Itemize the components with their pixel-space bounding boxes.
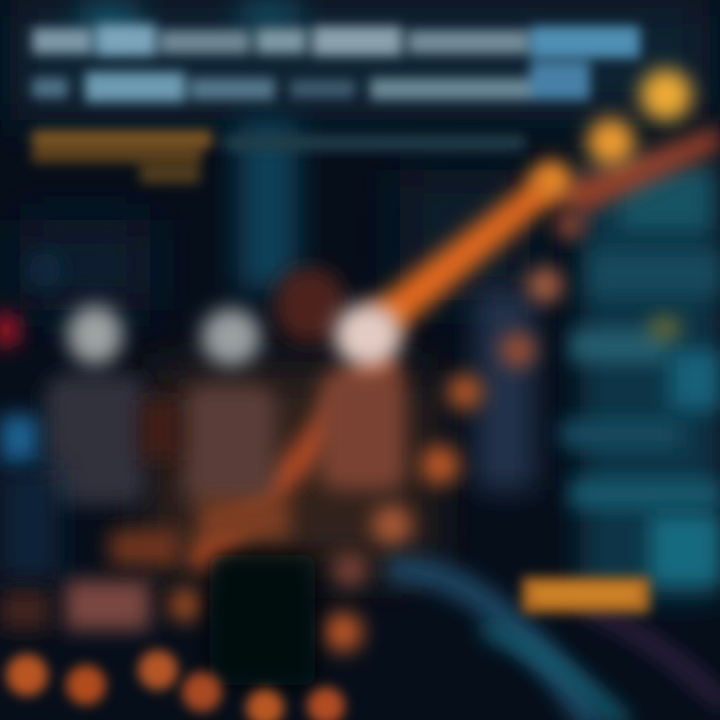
teal right panel bbox=[475, 160, 720, 600]
dark central shape bbox=[210, 555, 315, 685]
people silhouettes bbox=[0, 252, 405, 630]
orange label bbox=[522, 577, 650, 613]
title bbox=[32, 24, 640, 102]
chart nodes bbox=[323, 69, 692, 652]
subtitle bbox=[32, 130, 525, 183]
orange rising arrow bbox=[185, 125, 720, 575]
blue sweeps bottom right bbox=[355, 570, 720, 720]
bottom nodes bbox=[6, 650, 345, 720]
